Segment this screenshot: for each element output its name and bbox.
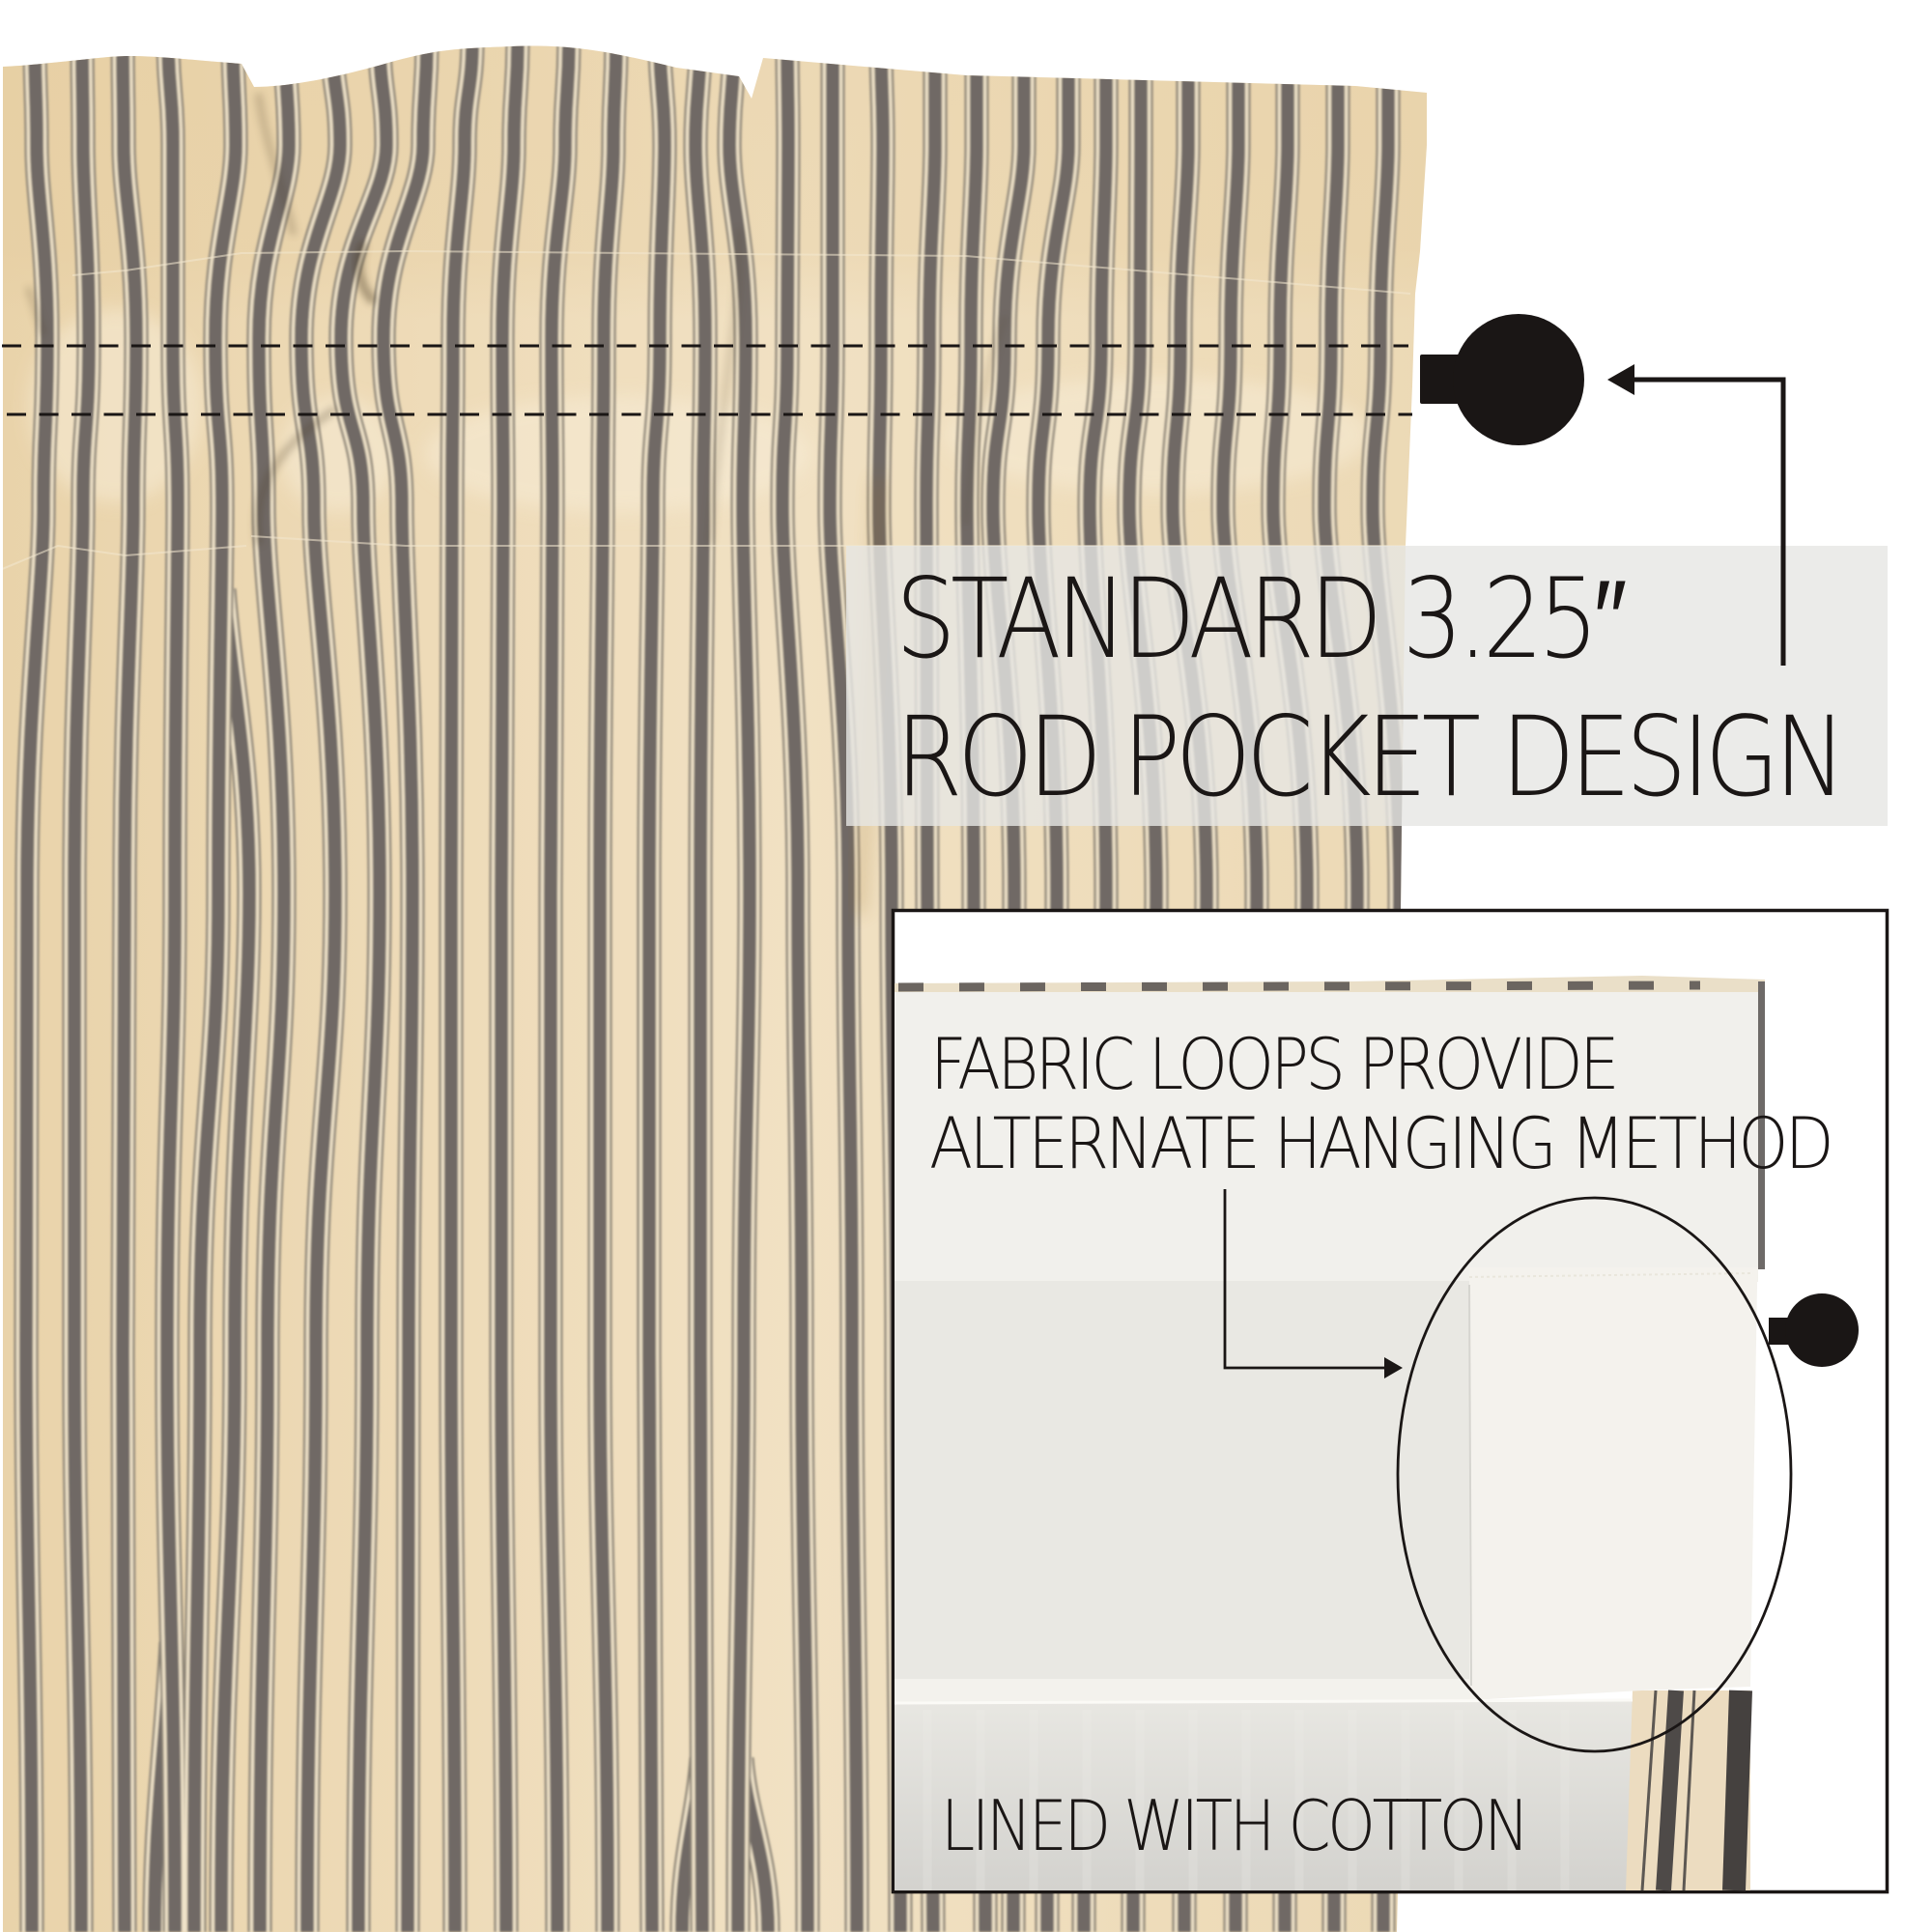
hem stitching	[0, 251, 1410, 570]
panel: lining detail inset	[893, 910, 1888, 1891]
hem tint	[6, 46, 1427, 272]
fabric loop tab	[1469, 1267, 1758, 1700]
icon: curtain rod finial	[1420, 314, 1584, 445]
heading: rod pocket caption: STANDARD 3.25″	[895, 554, 1626, 683]
dashed lines: rod pocket	[2, 346, 1412, 414]
oval highlight around loop	[1398, 1198, 1791, 1751]
ticking stripes	[26, 39, 1400, 1932]
icon: small rod finial	[1769, 1293, 1859, 1367]
fabric stitched band bottom	[895, 1679, 1474, 1702]
fabric upper lining	[895, 992, 1758, 1282]
text: fabric loops caption: ALTERNATE HANGING METHOD	[929, 1103, 1831, 1185]
panel: translucent caption background	[846, 546, 1888, 826]
fold shadows	[29, 97, 1005, 909]
text: lined with cotton: LINED WITH COTTON	[941, 1785, 1526, 1866]
fabric lower lining with stripe show-through	[895, 1700, 1633, 1890]
fabric ticking strip at lower right	[1626, 1690, 1750, 1890]
text: fabric loops caption: FABRIC LOOPS PROVIDE	[930, 1024, 1616, 1106]
heading: rod pocket caption	[895, 554, 1841, 821]
highlight lobes	[29, 309, 1372, 512]
arrow: loops callout	[1225, 1189, 1403, 1378]
fabric side edge stripe	[1758, 981, 1765, 1269]
arrow: callout to rod	[1607, 364, 1783, 666]
text: fabric loops caption	[929, 1024, 1831, 1185]
fabric hanging band shaded	[895, 1281, 1470, 1700]
panel: striped curtain fabric	[0, 29, 1449, 1932]
fabric top ticking edge	[895, 976, 1765, 997]
